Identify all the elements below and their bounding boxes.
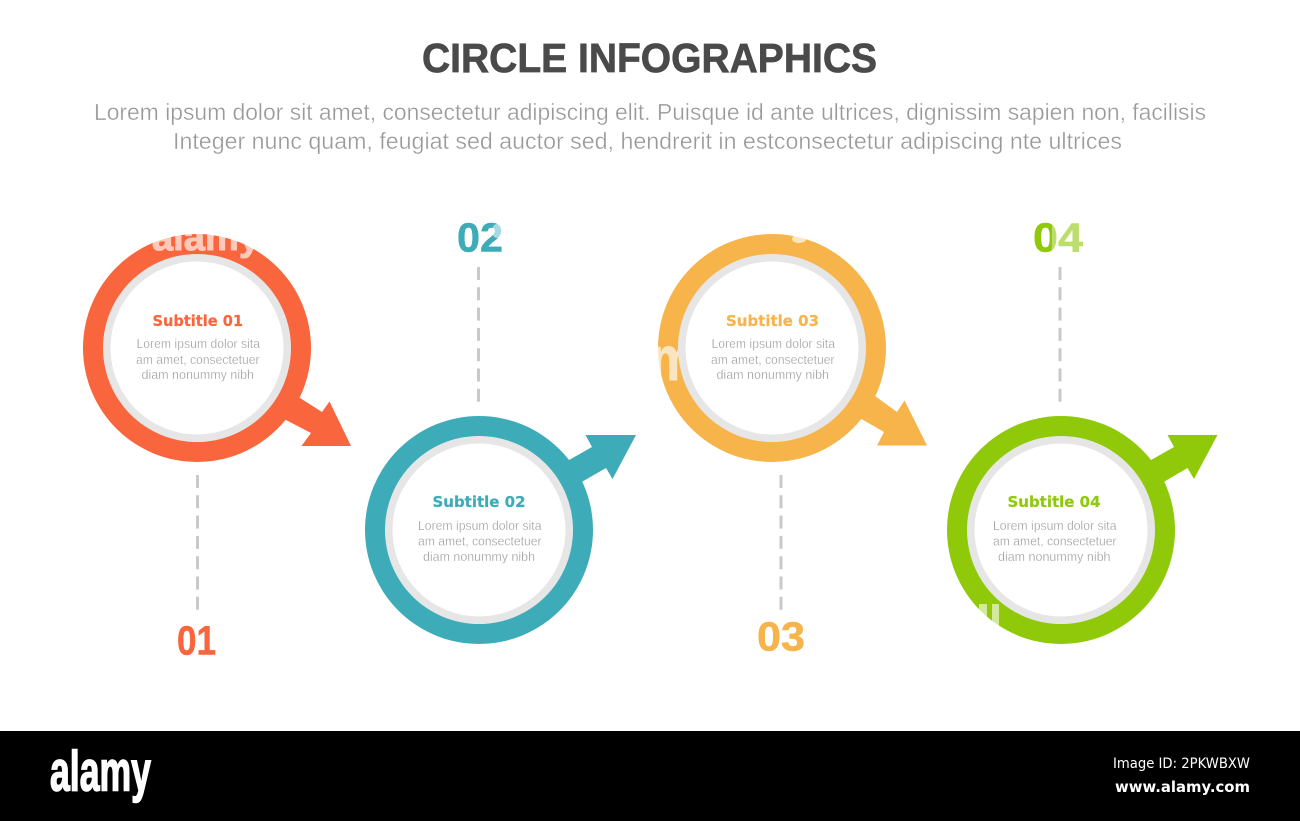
intro text	[94, 99, 1206, 154]
step 03	[650, 234, 927, 660]
step 01	[83, 217, 351, 664]
connector 02	[477, 267, 480, 403]
watermark fragment on number 02	[492, 224, 502, 238]
connector 04	[1058, 267, 1062, 403]
number 01: 01	[177, 618, 216, 664]
connector 03	[780, 475, 782, 610]
ring 03	[658, 234, 886, 462]
ring 03 inner	[678, 254, 866, 442]
watermark fragment on ring 04	[979, 604, 999, 628]
body 03: am amet, consectetuer	[711, 353, 834, 367]
body 04	[993, 519, 1117, 564]
body 01	[136, 337, 260, 382]
step 04	[947, 214, 1218, 644]
ring 04 inner	[967, 436, 1155, 624]
subtitle 03: Subtitle 03	[726, 312, 819, 330]
subtitle 01: Subtitle 01	[152, 312, 243, 330]
arrow 02	[560, 435, 636, 490]
image id: Image ID: 2PKWBXW	[1113, 756, 1250, 772]
body 01: am amet, consectetuer	[136, 353, 260, 367]
ring 01 inner	[103, 254, 291, 442]
body 02: am amet, consectetuer	[418, 534, 542, 548]
title: CIRCLE INFOGRAPHICS	[422, 35, 877, 81]
watermark fragment on ring 01: alamy	[152, 217, 260, 259]
watermark fragments on ring 03: m	[650, 325, 696, 394]
body 01: diam nonummy nibh	[142, 368, 254, 382]
arrow 04	[1142, 435, 1218, 490]
watermark logo: alamy	[50, 740, 151, 804]
number 02: 02	[457, 214, 503, 260]
website: www.alamy.com	[1115, 778, 1250, 796]
body 01: Lorem ipsum dolor sita	[136, 337, 260, 351]
body 03: Lorem ipsum dolor sita	[712, 337, 835, 351]
body 03: diam nonummy nibh	[716, 368, 829, 382]
step 02	[365, 214, 636, 644]
connector 01	[196, 475, 199, 610]
body 04: Lorem ipsum dolor sita	[993, 519, 1117, 533]
ring 02	[365, 416, 593, 644]
footer bar	[0, 731, 1300, 821]
intro text: Lorem ipsum dolor sit amet, consectetur adipiscing elit. Puisque id ante ultrices, dignissim sapien non, facilisis	[94, 99, 1206, 125]
arrow 03	[850, 390, 927, 446]
subtitle 04: Subtitle 04	[1008, 493, 1101, 511]
body 02	[418, 519, 542, 564]
body 04: am amet, consectetuer	[993, 534, 1116, 548]
subtitle 02: Subtitle 02	[432, 493, 526, 511]
watermark fragments on ring 03	[650, 235, 806, 394]
number 03: 03	[757, 614, 805, 660]
watermark fragment on number 04	[1052, 220, 1084, 254]
ring 02 inner	[385, 436, 573, 624]
ring 04	[947, 416, 1175, 644]
intro text: Integer nunc quam, feugiat sed auctor sed, hendrerit in estconsectetur adipiscing nte ultrices	[173, 128, 1122, 154]
ring 01	[83, 234, 311, 462]
body 03	[711, 337, 835, 382]
arrow 01	[275, 390, 351, 446]
body 04: diam nonummy nibh	[998, 550, 1111, 564]
body 02: diam nonummy nibh	[423, 550, 535, 564]
number 04: 04	[1033, 214, 1083, 260]
body 02: Lorem ipsum dolor sita	[418, 519, 542, 533]
